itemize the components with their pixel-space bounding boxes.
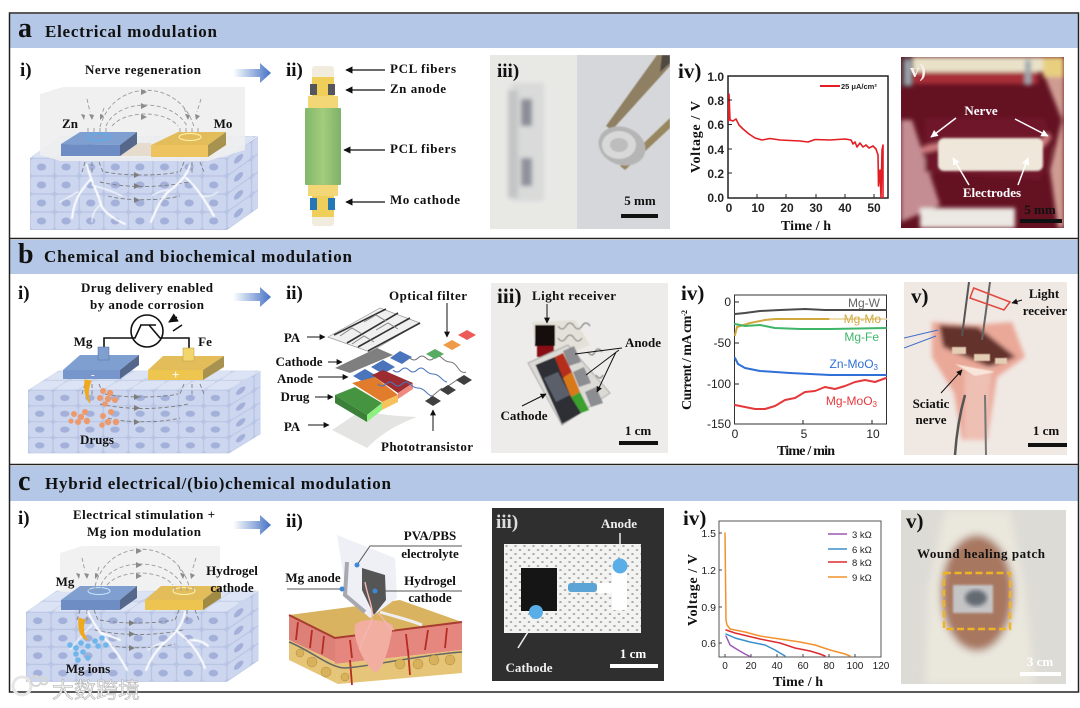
callouts c ii: electrolyte (401, 546, 459, 561)
series labels: Mg-MoO (826, 394, 873, 408)
axis titles: Voltage / V (689, 101, 704, 173)
patch (953, 585, 993, 613)
callouts b ii: Anode (277, 371, 313, 386)
label b iii: iii) (497, 284, 522, 308)
section c header: c (18, 466, 30, 497)
panel a ii: tube device (286, 60, 460, 226)
axis numbers (707, 70, 881, 215)
series labels: Mg-Fe (844, 330, 879, 344)
axis numbers: 0 (724, 295, 731, 309)
callouts b ii: Optical filter (389, 288, 467, 303)
cell stack a (30, 136, 258, 230)
axis numbers: 20 (745, 661, 757, 672)
axis numbers (701, 528, 890, 672)
resistor (568, 583, 597, 592)
legend (820, 82, 877, 91)
mo electrode (151, 132, 226, 157)
current below a (82, 162, 204, 203)
lightning nerves a (60, 165, 218, 224)
hydrogel box a (40, 87, 245, 161)
axis numbers: 0.6 (701, 638, 716, 650)
nerve conduit (938, 138, 1043, 171)
callouts c ii: cathode (408, 590, 452, 605)
white conductor (597, 562, 627, 610)
axis numbers: 1.2 (701, 565, 716, 577)
panel c i: hybrid diagram (18, 507, 271, 682)
axis numbers: 5 (801, 427, 808, 441)
axis numbers: 80 (823, 661, 835, 672)
scale a v: 5 mm (1024, 202, 1056, 217)
panel a i: nerve regeneration diagram (20, 60, 271, 230)
panel a v: surgical photo (901, 57, 1064, 228)
callouts b ii (276, 288, 473, 454)
watermark (13, 676, 140, 703)
panel b v: sciatic nerve photo (904, 282, 1067, 455)
optical filters (426, 330, 476, 359)
callout labels (344, 61, 460, 207)
fe electrode (148, 348, 224, 382)
label hydrogel cathode: Hydrogel (206, 563, 258, 578)
nerve and electrodes annotations (931, 103, 1048, 200)
corrosion arrow c (79, 618, 87, 640)
label a ii: ii) (286, 60, 303, 81)
axis numbers: 0.8 (707, 94, 724, 108)
nerve and electrodes annotations: Electrodes (963, 185, 1021, 200)
callouts c ii: Mg anode (285, 570, 341, 585)
axis numbers: 100 (847, 661, 864, 672)
axis numbers: -50 (714, 336, 731, 350)
nerve strand (360, 582, 394, 650)
drug layers (335, 370, 413, 422)
chart a iv: voltage vs time (689, 70, 888, 234)
callout labels: Mo cathode (390, 192, 460, 207)
patch label: Wound healing patch (917, 546, 1046, 561)
cathode electrode c (145, 586, 221, 610)
scale a iii: 5 mm (624, 193, 656, 208)
axis numbers: 0.2 (707, 167, 724, 181)
mg electrode c (61, 586, 137, 610)
axis numbers: -150 (707, 417, 731, 431)
panel c ii: wound patch (285, 511, 462, 685)
axis numbers: 10 (751, 201, 765, 215)
chart a iv: voltage vs time: Time / h (781, 219, 831, 234)
axis numbers: 0 (732, 427, 739, 441)
callouts b ii: Phototransistor (381, 439, 473, 454)
label b v: v) (911, 284, 928, 308)
axis numbers: 1.0 (707, 70, 724, 84)
label mo: Mo (214, 116, 232, 131)
series labels: Zn-MoO (830, 357, 874, 371)
series labels: Mg-Mo (844, 312, 881, 326)
field lines c (76, 548, 196, 591)
section b header: Chemical and biochemical modulation (44, 247, 353, 266)
callouts c ii (285, 528, 462, 605)
axis titles: Voltage / V (686, 554, 701, 626)
patch (337, 535, 422, 625)
photo labels: Cathode (506, 660, 553, 675)
callouts b v: Light (1029, 286, 1060, 301)
chart c iv: voltage vs time (686, 521, 890, 690)
section c header (10, 466, 1078, 501)
chart b iv: current vs time (680, 295, 886, 459)
photo labels: Anode (601, 516, 637, 531)
light receiver outline (970, 288, 1010, 310)
lightning c (70, 612, 208, 670)
axis titles: Current / mA cm (680, 316, 695, 410)
axis numbers: 40 (771, 661, 783, 672)
label a i: i) (20, 60, 32, 81)
current below c (77, 610, 199, 651)
tube (305, 66, 341, 226)
axis numbers: 120 (873, 661, 890, 672)
section b header: b (18, 239, 34, 270)
heading drug delivery (81, 280, 214, 312)
bottom pa (332, 410, 417, 448)
legend: 3 kΩ (852, 530, 872, 541)
chart b iv: current vs time: Time / min (777, 444, 835, 459)
wound tissue (355, 620, 393, 673)
section a header: Electrical modulation (45, 22, 218, 41)
label c iii: iii) (496, 512, 518, 533)
callouts b v: Sciatic (913, 396, 950, 411)
legend (828, 530, 872, 584)
callouts c ii: PVA/PBS (404, 528, 456, 543)
axis numbers: 0 (722, 661, 728, 672)
chart c iv: voltage vs time: Time / h (773, 675, 823, 690)
callouts b ii: Cathode (276, 354, 323, 369)
axis numbers: 50 (867, 201, 881, 215)
corrosion arrow (85, 380, 91, 403)
watermark: 大数跨境 (52, 678, 140, 703)
label drugs: Drugs (80, 432, 114, 447)
callout labels: PCL fibers (390, 61, 456, 76)
panel b ii: exploded device (276, 283, 476, 454)
series labels: 3 (874, 363, 879, 372)
callout labels: PCL fibers (390, 141, 456, 156)
heading hybrid stimulation (73, 507, 215, 539)
legend: 9 kΩ (852, 573, 872, 584)
callout labels: Zn anode (390, 81, 446, 96)
heading hybrid stimulation: Electrical stimulation + (73, 507, 215, 522)
label a iii: iii) (497, 61, 519, 82)
heading drug delivery: Drug delivery enabled (81, 280, 214, 295)
flow arrow a (233, 63, 271, 83)
label c ii: ii) (286, 511, 303, 532)
nerve and electrodes annotations: Nerve (964, 103, 998, 118)
legend: 25 μA/cm² (841, 82, 877, 91)
label hydrogel cathode: cathode (210, 580, 254, 595)
current below b (82, 384, 204, 425)
terminal dots (518, 533, 628, 648)
section a header: a (18, 13, 32, 44)
dashed highlight (944, 573, 1010, 629)
cathode sheet (335, 348, 393, 373)
axis numbers: 40 (838, 201, 852, 215)
label c i: i) (18, 508, 30, 529)
panel b i: drug delivery diagram (18, 280, 271, 453)
section c header: Hybrid electrical/(bio)chemical modulation (45, 474, 392, 493)
legend: 8 kΩ (852, 558, 872, 569)
heading nerve regeneration: Nerve regeneration (85, 62, 202, 77)
panel a iii: photo (490, 55, 670, 229)
callouts b ii: Drug (281, 389, 310, 404)
callouts b ii: PA (284, 419, 301, 434)
instruments (904, 282, 990, 455)
phototransistor circuit (104, 315, 189, 358)
axis titles: -2 (680, 310, 689, 316)
mg ion particles (67, 635, 109, 663)
heading hybrid stimulation: Mg ion modulation (87, 524, 202, 539)
flow arrow c (233, 515, 271, 535)
series labels: Mg-W (848, 296, 881, 310)
scale c v: 3 cm (1027, 654, 1053, 669)
axis numbers: -100 (707, 377, 731, 391)
axis numbers: 0.0 (707, 191, 724, 205)
wavy interconnects (378, 356, 466, 398)
cell stack c (26, 591, 259, 682)
hydrogel box c (60, 546, 220, 592)
axis numbers: 60 (797, 661, 809, 672)
section b header (10, 239, 1078, 274)
mesh substrate (504, 544, 641, 633)
photo labels (506, 516, 637, 675)
callouts c ii: Hydrogel (404, 573, 456, 588)
mg electrode: - (91, 369, 95, 381)
label mg: Mg (74, 334, 93, 349)
mg electrode (63, 347, 139, 381)
cell stack b (28, 371, 261, 453)
label mg: Mg (56, 574, 75, 589)
fe electrode: + (172, 367, 179, 382)
black electrode (521, 568, 557, 611)
series labels (826, 296, 881, 409)
label b iv: iv) (681, 281, 704, 305)
callouts b ii: PA (284, 330, 301, 345)
label zn: Zn (62, 116, 79, 131)
axis numbers (707, 295, 880, 441)
label hydrogel cathode (206, 563, 258, 595)
field lines a (81, 89, 201, 132)
axis numbers: 0.9 (701, 602, 716, 614)
panel b iii: device photo (491, 283, 668, 453)
label c v: v) (906, 509, 924, 533)
phototransistors (425, 375, 472, 406)
axis numbers: 10 (866, 427, 880, 441)
flow arrow b (233, 287, 271, 307)
middle plate a (120, 143, 151, 156)
axis numbers: 0 (726, 201, 733, 215)
axis numbers: 20 (780, 201, 794, 215)
drug particles (68, 388, 119, 428)
label c iv: iv) (683, 506, 706, 530)
section a header (10, 13, 1078, 48)
callouts b iii (501, 288, 661, 423)
label a iv: iv) (678, 59, 701, 83)
top pa chip (328, 308, 420, 352)
scale b v: 1 cm (1033, 423, 1059, 438)
callouts b v (913, 286, 1067, 427)
label b i: i) (18, 283, 30, 304)
skin block (289, 600, 462, 685)
panel c v: rat photo (901, 509, 1066, 684)
series labels: 3 (873, 400, 878, 409)
label fe: Fe (198, 334, 212, 349)
axis numbers: 30 (809, 201, 823, 215)
panel c iii: device photo (492, 508, 664, 681)
zn electrode (61, 132, 137, 156)
scale b iii: 1 cm (625, 423, 651, 438)
axis numbers: 0.6 (707, 118, 724, 132)
legend: 6 kΩ (852, 545, 872, 556)
anode squares (353, 351, 412, 383)
callouts b iii: Light receiver (532, 288, 616, 303)
label mg ions: Mg ions (66, 661, 110, 676)
axis numbers: 1.5 (701, 528, 716, 540)
callouts b iii: Anode (625, 335, 661, 350)
scale c iii: 1 cm (620, 646, 646, 661)
axis numbers: 0.4 (707, 143, 724, 157)
callouts b v: nerve (915, 412, 947, 427)
callouts b iii: Cathode (501, 408, 548, 423)
heading drug delivery: by anode corrosion (90, 297, 205, 312)
label a v: v) (910, 61, 926, 82)
callouts b v: receiver (1023, 303, 1067, 318)
label b ii: ii) (286, 283, 303, 304)
